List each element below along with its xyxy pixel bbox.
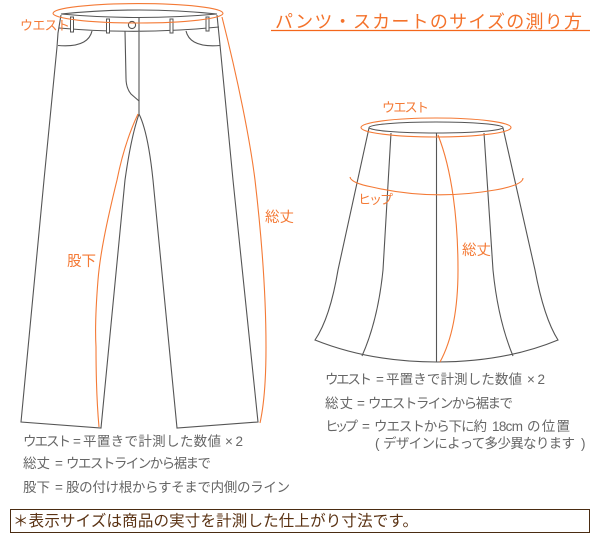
pants inseam measure [96,114,138,427]
pants notes: = [55,480,63,495]
skirt notes: = [362,419,370,434]
belt loops [70,17,209,33]
skirt notes: 平置きで計測した数値 [386,372,522,387]
pants outseam measure [222,17,266,423]
pants notes: 股の付け根からすそまで内側のライン [66,480,290,495]
skirt notes: ウエスト [325,372,372,387]
footer note: ＊表示サイズは商品の実寸を計測した仕上がり寸法です。 [13,512,418,530]
skirt notes [325,372,586,451]
skirt notes: の位置 [527,419,570,434]
label: skirt length: 総丈 [462,242,491,259]
skirt illustration [315,100,558,362]
pants button [128,21,136,29]
label: skirt waist: ウエスト [382,100,429,115]
skirt notes: ヒップ [325,419,358,434]
skirt notes: = [376,372,384,387]
pants illustration [20,4,294,428]
skirt notes: ウエストから下に約 [374,419,487,434]
skirt hip measure [350,177,523,195]
skirt waist [369,122,503,133]
skirt notes: ×2 [527,372,545,387]
pants fly [125,31,139,101]
skirt notes: ( [375,436,380,451]
footer note [10,510,590,532]
pants pockets [58,31,220,46]
pants waist measure [53,4,223,23]
skirt notes: デザインによって多少異なります [383,435,575,451]
pants notes: 平置きで計測した数値 [83,434,221,449]
skirt seams [362,133,513,362]
pants notes: ×2 [225,434,243,449]
skirt notes: ) [581,436,586,451]
skirt notes: = [357,396,365,411]
skirt notes: ウエストラインから裾まで [368,396,513,411]
pants notes: = [73,434,81,449]
skirt waist measure [361,118,511,137]
label: hip: ヒップ [358,192,393,207]
skirt notes: 総丈 [325,396,353,411]
skirt length measure [438,135,458,362]
pants notes [23,434,290,495]
skirt notes: 18cm [492,419,523,434]
title: パンツ・スカートのサイズの測り方 [275,12,582,32]
pants notes: 総丈 [23,456,50,471]
skirt outline [315,128,558,362]
pants notes: = [55,456,63,471]
pants notes: 股下 [23,480,50,495]
pants notes: ウエストラインから裾まで [66,456,211,471]
pants outline [21,15,258,428]
label: total length: 総丈 [265,209,294,226]
pants notes: ウエスト [23,434,71,449]
pants waistband [59,10,219,114]
label: waist: ウエスト [20,18,70,33]
label: inseam: 股下 [67,254,96,270]
